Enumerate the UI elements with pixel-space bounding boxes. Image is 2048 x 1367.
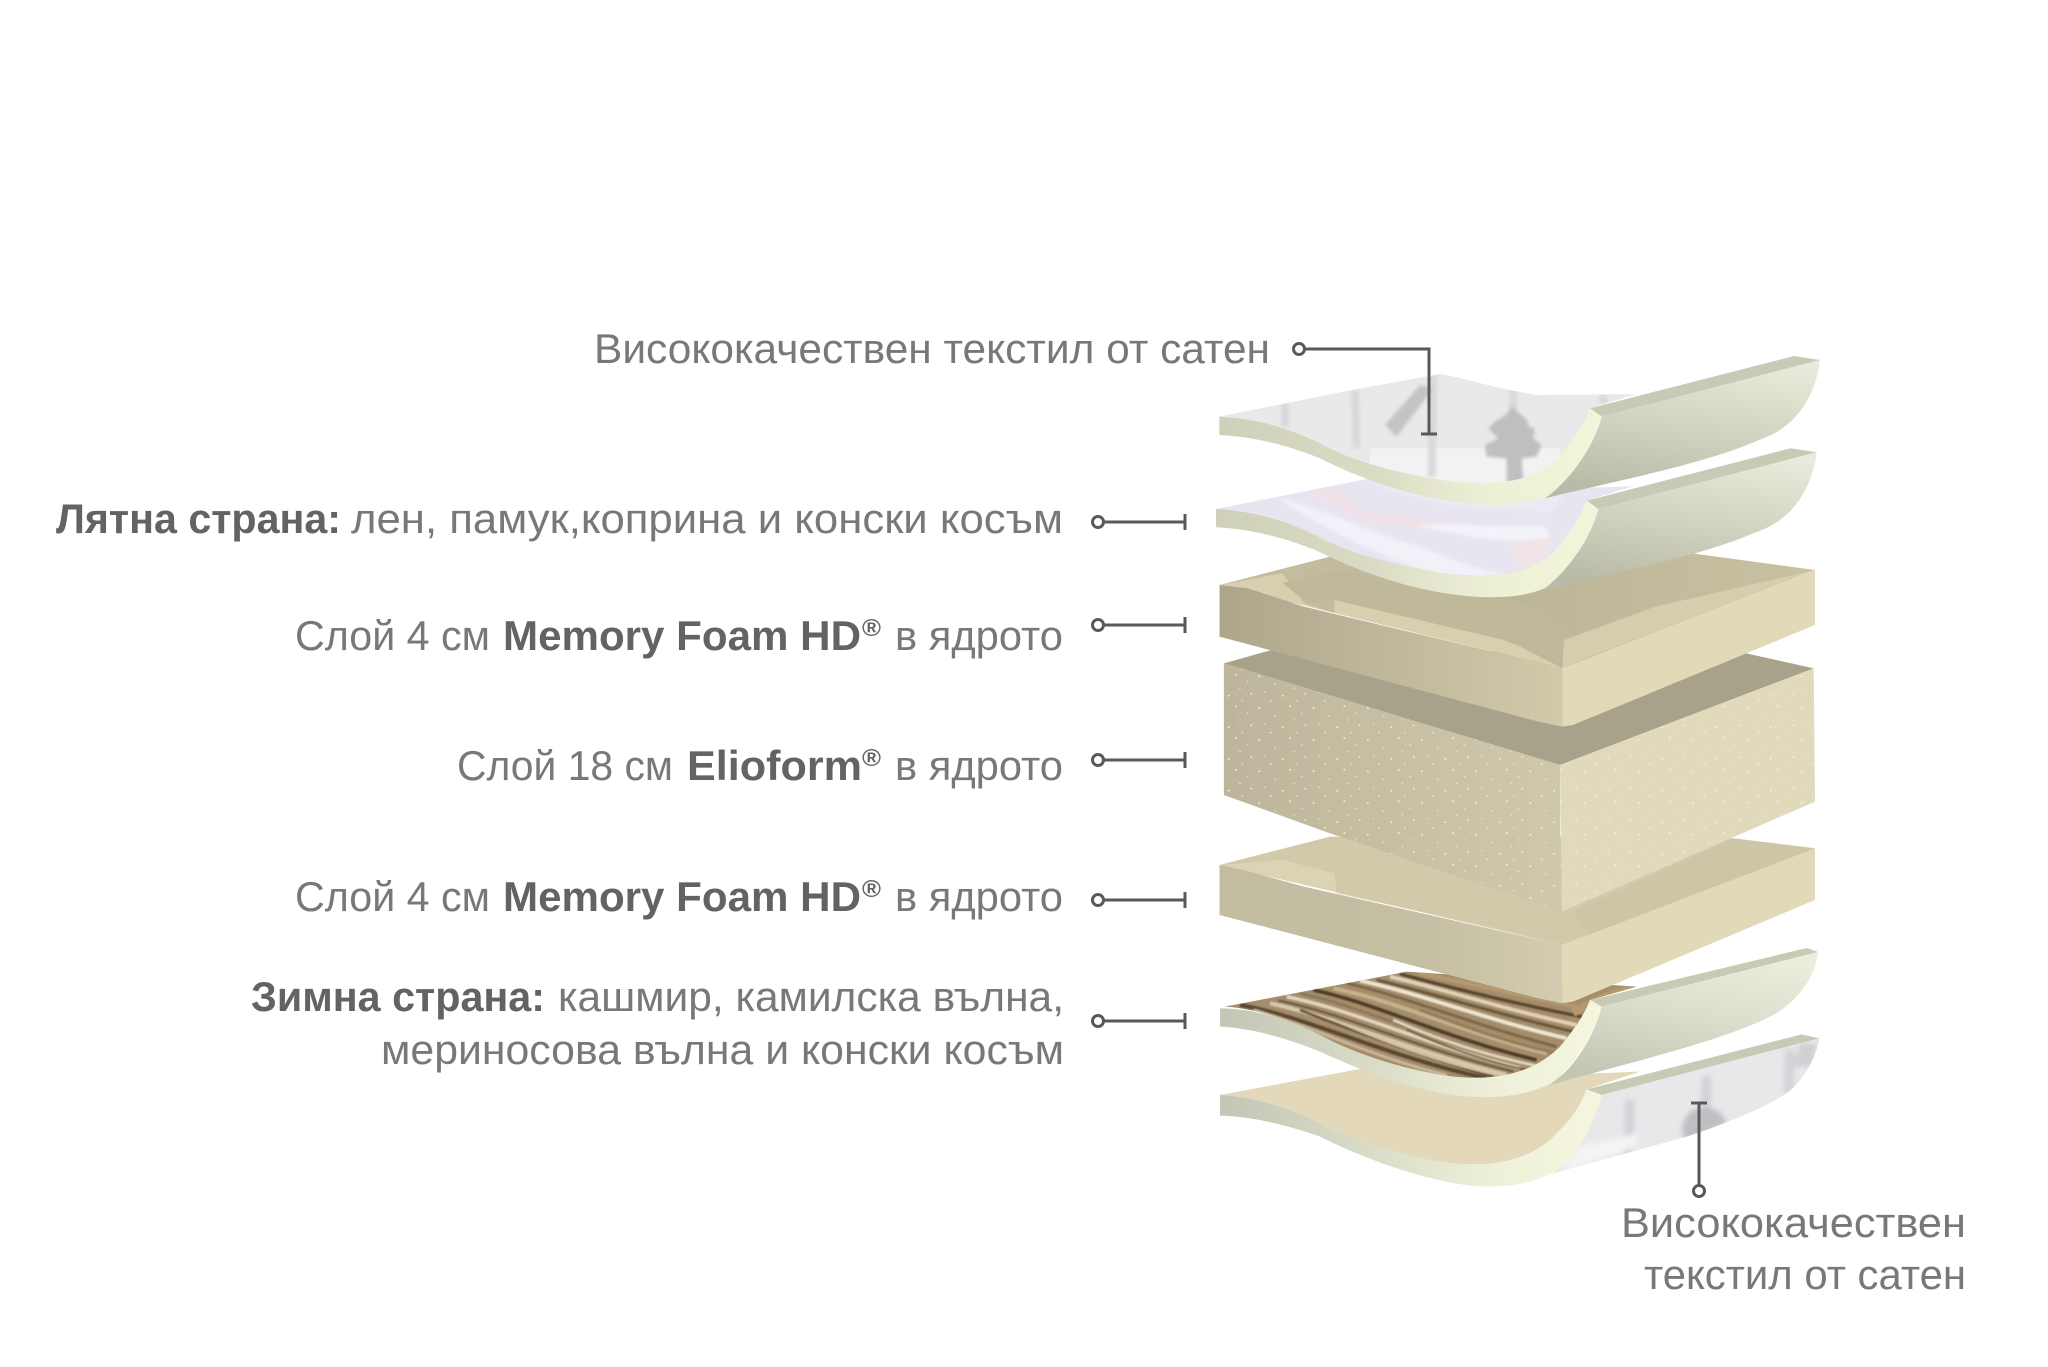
- label: Elioform: [457, 742, 1063, 789]
- label: summer side: Лятна страна:: [56, 495, 341, 542]
- label: upper memory foam: Слой 4 см: [295, 612, 490, 659]
- top back strip: [1590, 356, 1820, 417]
- top side flap: [1545, 360, 1820, 498]
- layer: bottom satin textile: [1220, 1033, 1827, 1187]
- summer back strip: [1587, 448, 1817, 509]
- leader: summer side: [1092, 514, 1185, 530]
- layer: lower Memory Foam block: [1220, 837, 1815, 1003]
- lower foam left face: [1220, 865, 1562, 1003]
- label: bottom satin: Висококачествен: [1621, 1199, 1966, 1246]
- leader: Elioform: [1092, 752, 1185, 768]
- Elioform left face: [1224, 663, 1561, 912]
- bottom layer satin flap: [1554, 1038, 1819, 1173]
- Elioform top: [1224, 650, 1814, 765]
- label: upper memory foam: ®: [862, 615, 881, 642]
- lower foam top: [1220, 837, 1815, 945]
- label: bottom satin: [1621, 1199, 1966, 1298]
- top front edge: [1219, 408, 1602, 505]
- upper foam top: [1220, 552, 1815, 668]
- wool surface: [1225, 972, 1636, 1078]
- label: lower memory foam: ®: [862, 876, 881, 903]
- label: lower memory foam: [295, 873, 1063, 920]
- label: upper memory foam: в ядрото: [895, 612, 1063, 659]
- leader: upper memory foam: [1092, 617, 1185, 633]
- label: top satin: Висококачествен текстил от сатен: [594, 325, 1270, 372]
- layer: top satin textile: [1217, 356, 1820, 505]
- bottom layer inner surface: [1220, 1068, 1640, 1164]
- label: Elioform: Слой 18 см: [457, 742, 673, 789]
- Elioform right face: [1560, 668, 1815, 912]
- label: summer side: лен, памук,коприна и конски косъм: [351, 495, 1063, 542]
- layer: Elioform block: [1224, 650, 1815, 912]
- bottom layer back strip: [1587, 1034, 1819, 1095]
- label: lower memory foam: Слой 4 см: [295, 873, 490, 920]
- wool layer side flap: [1550, 952, 1818, 1085]
- label: summer side: [56, 495, 1063, 542]
- leader: bottom satin: [1691, 1103, 1707, 1196]
- lower foam right face: [1562, 848, 1815, 1003]
- label: bottom satin: текстил от сатен: [1644, 1251, 1966, 1298]
- wool layer back strip: [1590, 948, 1818, 1007]
- label: lower memory foam: в ядрото: [895, 873, 1063, 920]
- label: winter side: мериносова вълна и конски косъм: [381, 1026, 1064, 1073]
- wool layer front edge: [1220, 1000, 1602, 1097]
- satin ornament crest: [1485, 405, 1542, 482]
- label: Elioform: Elioform: [687, 742, 862, 789]
- label: Elioform: в ядрото: [895, 742, 1063, 789]
- layer: winter side wool: [1220, 948, 1818, 1097]
- summer front edge: [1216, 501, 1598, 597]
- upper foam left face: [1220, 585, 1562, 727]
- summer surface: [1217, 479, 1633, 576]
- summer side flap: [1542, 452, 1817, 591]
- bottom layer front edge: [1220, 1089, 1602, 1187]
- label: upper memory foam: Memory Foam HD: [503, 612, 861, 659]
- label: upper memory foam: [295, 612, 1063, 659]
- top satin surface: [1221, 374, 1636, 483]
- leader: lower memory foam: [1092, 892, 1185, 908]
- upper foam right face: [1562, 570, 1815, 727]
- leader: winter side: [1092, 1013, 1185, 1029]
- label: lower memory foam: Memory Foam HD: [503, 873, 861, 920]
- layer: upper Memory Foam block: [1220, 552, 1815, 727]
- label: Elioform: ®: [862, 745, 881, 772]
- label: winter side: кашмир, камилска вълна,: [558, 973, 1064, 1020]
- leader: top satin: [1294, 344, 1437, 434]
- mattress layers infographic: [56, 334, 1964, 1290]
- label: winter side: Зимна страна:: [251, 973, 545, 1020]
- label: winter side: [251, 973, 1064, 1073]
- layer: summer side: [1213, 448, 1817, 597]
- satin ornament bar: [1385, 385, 1433, 437]
